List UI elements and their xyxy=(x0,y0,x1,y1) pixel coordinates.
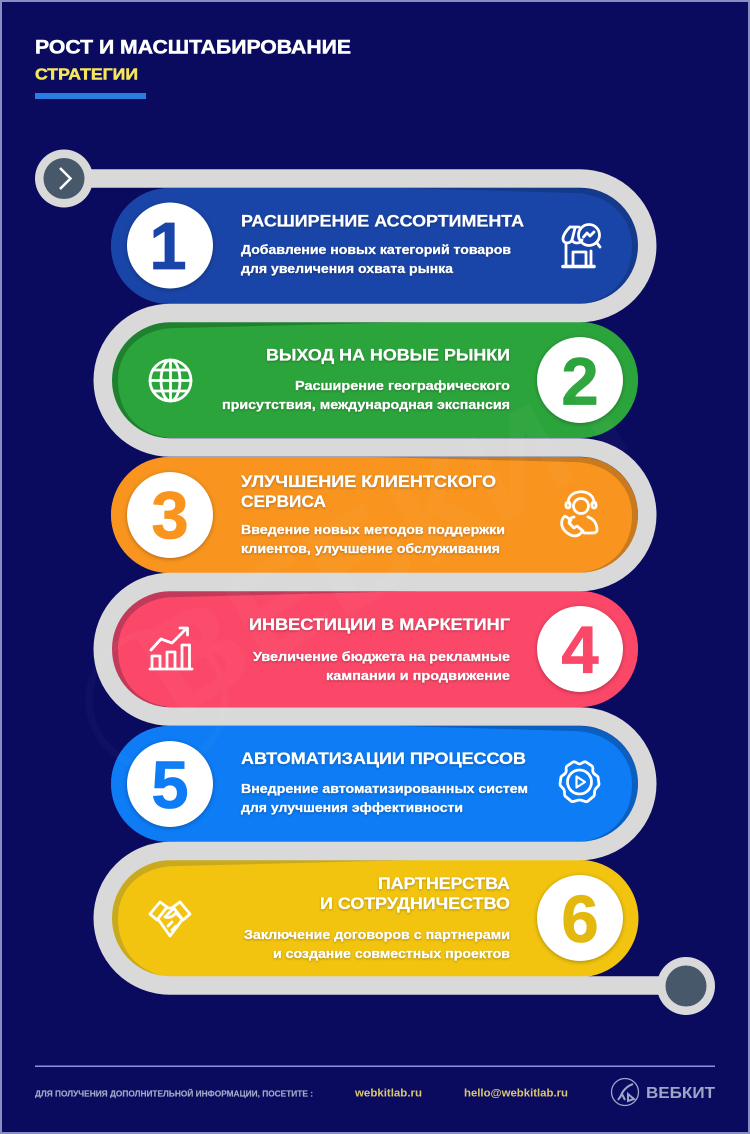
pill shape xyxy=(111,322,638,438)
text block 5: Внедрение автоматизированных систем xyxy=(241,781,528,796)
text block 6 xyxy=(244,875,510,961)
pill shape xyxy=(111,726,638,842)
number badge 1: 1 xyxy=(149,209,187,284)
icon: growth chart xyxy=(150,628,192,669)
text block 5 xyxy=(241,750,528,815)
pill shape xyxy=(111,860,639,977)
text block 3: УЛУЧШЕНИЕ КЛИЕНТСКОГО xyxy=(241,473,496,491)
email: hello@webkitlab.ru xyxy=(464,1088,568,1100)
text block 2 xyxy=(222,346,510,412)
website: webkitlab.ru xyxy=(354,1088,422,1100)
text block 6: Заключение договоров с партнерами xyxy=(244,927,510,942)
text block 1: для увеличения охвата рынка xyxy=(241,261,454,276)
winding track xyxy=(64,178,686,986)
panel: step 4 xyxy=(111,591,638,707)
watermark: ВЕБКИТ xyxy=(114,330,669,744)
panel: step 5 xyxy=(111,726,638,842)
text block 4 xyxy=(249,616,511,683)
subtitle: СТРАТЕГИИ xyxy=(35,66,138,84)
text block 2: ВЫХОД НА НОВЫЕ РЫНКИ xyxy=(266,346,510,364)
icon: globe xyxy=(150,360,191,401)
pill shape xyxy=(111,457,638,573)
title: РОСТ И МАСШТАБИРОВАНИЕ xyxy=(35,36,351,58)
text block 3: Введение новых методов поддержки xyxy=(241,522,505,537)
text block 3 xyxy=(241,473,505,556)
text block 3: СЕРВИСА xyxy=(241,493,326,511)
icon: shop with magnifier xyxy=(563,224,600,266)
header xyxy=(35,36,351,99)
number badge 6 xyxy=(537,875,623,961)
text block 2: присутствия, международная экспансия xyxy=(222,397,510,412)
text block 5: для улучшения эффективности xyxy=(241,800,463,815)
number badge 4 xyxy=(537,606,623,692)
number badge 1 xyxy=(127,202,213,288)
text block 3: клиентов, улучшение обслуживания xyxy=(241,541,500,556)
pill shape xyxy=(111,188,638,304)
number badge 2 xyxy=(537,337,623,423)
text block 6: и создание совместных проектов xyxy=(273,946,510,961)
accent bar xyxy=(35,93,146,99)
text block 2: Расширение географического xyxy=(295,378,510,393)
number badge 6: 6 xyxy=(561,882,599,957)
text block 4: кампании и продвижение xyxy=(326,668,510,683)
footer xyxy=(35,1066,715,1106)
text block 1 xyxy=(241,212,524,276)
panel: step 2 xyxy=(111,322,638,438)
icon: handshake xyxy=(150,902,190,936)
text block 6: ПАРТНЕРСТВА xyxy=(378,875,510,893)
text block 1: Добавление новых категорий товаров xyxy=(241,242,511,257)
logo xyxy=(612,1078,715,1106)
icon: gear with play xyxy=(560,762,599,802)
icon: headset support xyxy=(562,492,597,536)
start marker with arrow xyxy=(35,150,93,208)
logo: ВЕБКИТ xyxy=(646,1085,715,1102)
text block 5: АВТОМАТИЗАЦИИ ПРОЦЕССОВ xyxy=(241,750,526,768)
panel: step 1 xyxy=(111,188,638,304)
text block 4: ИНВЕСТИЦИИ В МАРКЕТИНГ xyxy=(249,616,511,634)
footer note: ДЛЯ ПОЛУЧЕНИЯ ДОПОЛНИТЕЛЬНОЙ ИНФОРМАЦИИ, ПОСЕТИТЕ : xyxy=(35,1088,313,1098)
end marker xyxy=(657,957,715,1015)
panel: step 3 xyxy=(111,457,638,573)
number badge 5 xyxy=(127,741,213,827)
number badge 5: 5 xyxy=(151,748,189,823)
text block 6: И СОТРУДНИЧЕСТВО xyxy=(320,895,510,913)
panel: step 6 xyxy=(111,860,639,977)
text block 1: РАСШИРЕНИЕ АССОРТИМЕНТА xyxy=(241,212,524,230)
number badge 4: 4 xyxy=(561,613,599,688)
pill shape xyxy=(111,591,638,707)
text block 4: Увеличение бюджета на рекламные xyxy=(253,649,510,664)
number badge 2: 2 xyxy=(561,344,599,420)
number badge 3 xyxy=(127,472,213,558)
number badge 3: 3 xyxy=(151,478,189,554)
